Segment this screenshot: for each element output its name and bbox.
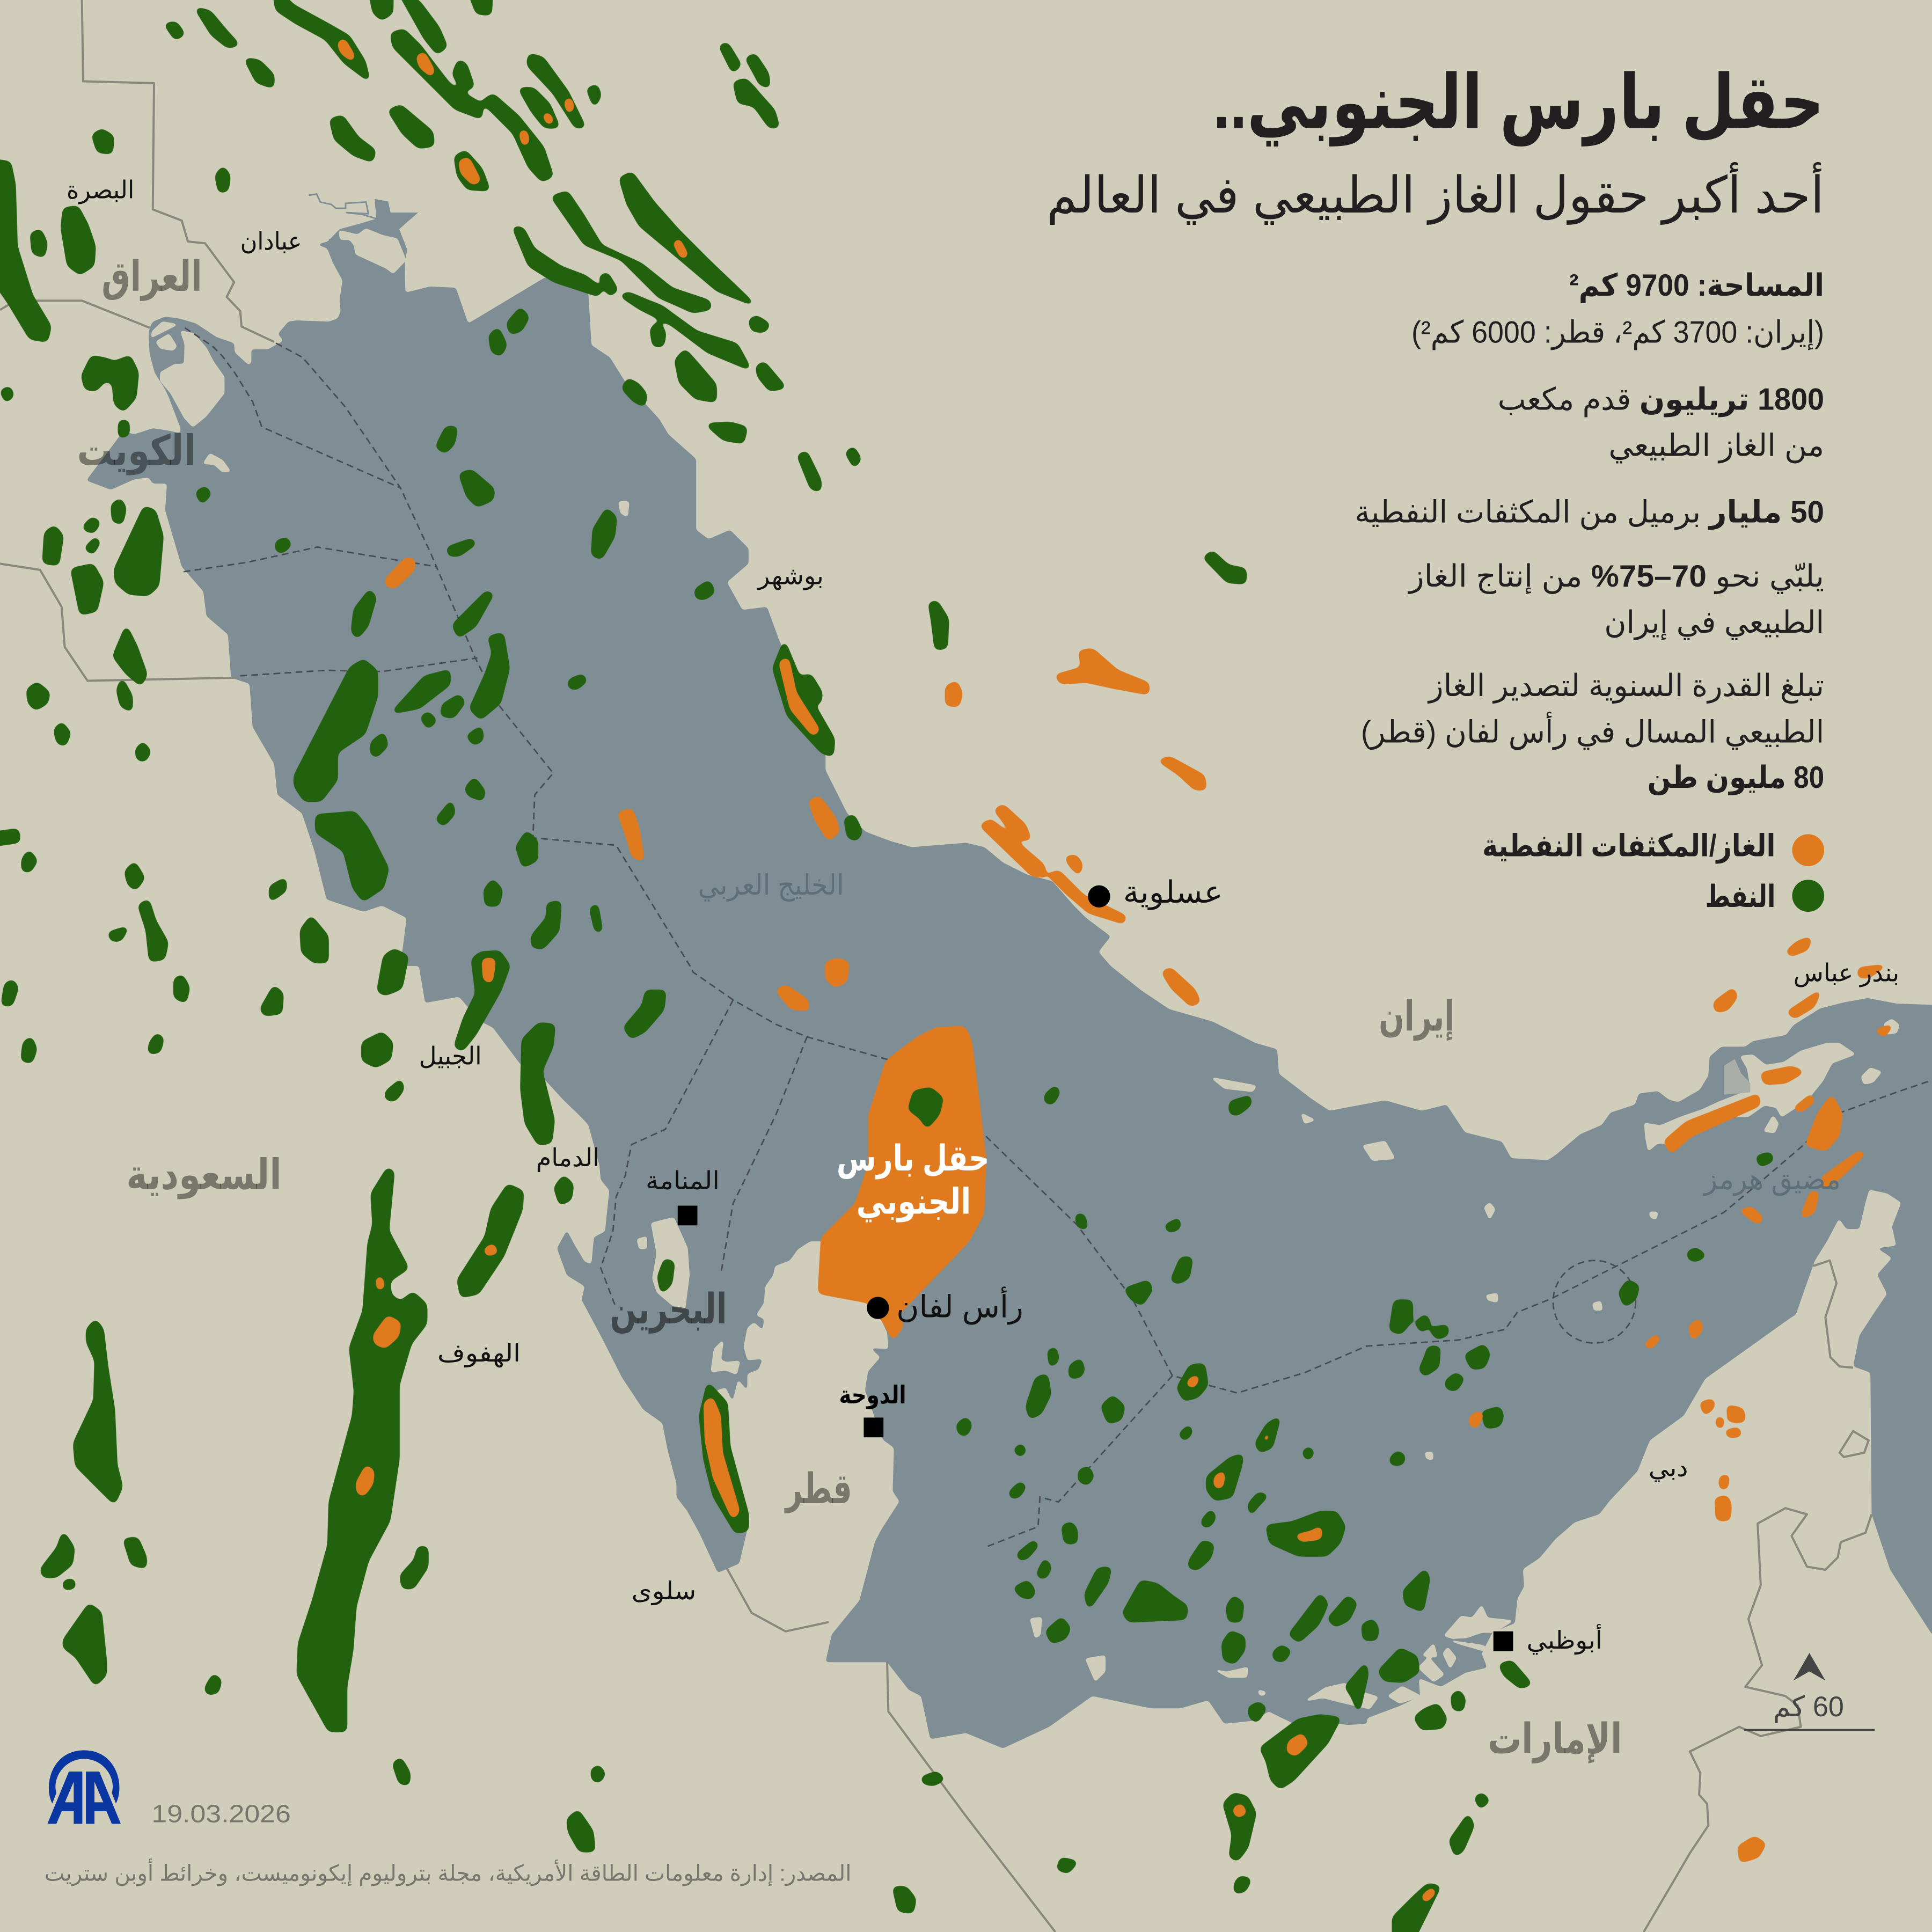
islands [151, 229, 1899, 1708]
country label: Iraq: العراق [101, 253, 202, 301]
country label: Qatar: قطر [784, 1465, 852, 1513]
city label: Ras Laffan: رأس لفان [896, 1286, 1023, 1324]
legend swatch: oil [1792, 880, 1824, 912]
city label: Abadan: عبادان [240, 227, 302, 255]
city label: Salwa: سلوى [632, 1577, 696, 1606]
fact: gas reserves line 1: 1800 تريليون قدم مكعب [1498, 382, 1824, 417]
city label: Bandar Abbas: بندر عباس [1794, 959, 1899, 987]
country label: UAE: الإمارات [1488, 1715, 1622, 1764]
icon: AA logo [47, 1750, 121, 1824]
gas fields near Asaluyeh [982, 650, 1810, 955]
South Pars field label: الجنوبي [857, 1182, 971, 1223]
oil fields: central and southern Gulf, UAE [1011, 1087, 1772, 1932]
city label: Basra: البصرة [67, 176, 134, 205]
date: 19.03.2026 [151, 1800, 291, 1828]
facts text block [1355, 268, 1824, 795]
fact: Iran share line 2: الطبيعي في إيران [1604, 605, 1824, 641]
city label: Dubai: دبي [1649, 1454, 1688, 1483]
marker: Doha [863, 1417, 883, 1437]
city label: Manama: المنامة [646, 1167, 720, 1195]
subtitle: أحد أكبر حقول الغاز الطبيعي في العالم [1046, 162, 1824, 225]
South Pars field label: حقل بارس [837, 1139, 990, 1179]
legend swatch: gas [1792, 834, 1824, 866]
oil fields: north-west quadrant [0, 0, 947, 961]
city label: Hofuf: الهفوف [437, 1339, 521, 1368]
South Pars field label [837, 1139, 990, 1223]
Shatt al-Arab river [309, 194, 376, 219]
gas fields: north-west quadrant [339, 40, 961, 859]
oil field east of Bushehr [1205, 553, 1245, 582]
fact: gas reserves line 2: من الغاز الطبيعي [1608, 428, 1824, 463]
fact: condensates: 50 مليار برميل من المكثفات النفطية [1355, 495, 1824, 530]
city label: Jubail: الجبيل [419, 1042, 482, 1070]
Shatt al-Arab estuary [328, 199, 418, 271]
city label: Dammam: الدمام [536, 1144, 599, 1172]
legend label: oil: النفط [1706, 880, 1775, 914]
capital label: Doha: الدوحة [839, 1381, 906, 1409]
fields: south-east quadrant [1011, 966, 1891, 1932]
country label: Iran: إيران [1379, 993, 1454, 1042]
fact: LNG line 2: الطبيعي المسال في رأس لفان (قطر) [1361, 712, 1824, 750]
gas cores: Saudi Arabia, Qatar and Bahrain [357, 960, 848, 1517]
fact: LNG line 1: تبلغ القدرة السنوية لتصدير الغاز [1427, 669, 1824, 704]
scale bar: 60 كم [1773, 1691, 1844, 1723]
north arrow [1794, 1653, 1825, 1681]
fields: south-west quadrant [3, 950, 970, 1912]
legend [1482, 829, 1824, 914]
legend label: gas/condensates: الغاز/المكثفات النفطية [1482, 829, 1775, 864]
fact: area: المساحة: 9700 كم² [1569, 268, 1824, 303]
country label: Bahrain: البحرين [610, 1285, 727, 1334]
marker: Asaluyeh [1088, 885, 1110, 908]
sea label: Arabian Gulf: الخليج العربي [698, 869, 844, 902]
country label: Saudi Arabia: السعودية [126, 1151, 282, 1199]
fact: LNG line 3: 80 مليون طن [1648, 760, 1824, 795]
oil fields: Saudi Arabia, Qatar and Bahrain [3, 950, 970, 1912]
city label: Bushehr: بوشهر [757, 561, 824, 590]
marker: Abu Dhabi [1494, 1631, 1513, 1651]
city label: Abu Dhabi: أبوظبي [1527, 1624, 1602, 1655]
marker: Manama [678, 1206, 697, 1225]
country label: Kuwait: الكويت [77, 427, 196, 475]
sea area [86, 229, 1932, 1748]
marker: Ras Laffan [867, 1297, 889, 1319]
map labels [67, 176, 1899, 1764]
city label: Asaluyeh: عسلوية [1123, 875, 1223, 910]
fact: area split: (إيران: 3700 كم²، قطر: 6000 كم²) [1411, 315, 1824, 350]
South Pars gas field [819, 1028, 984, 1339]
sea label: Strait of Hormuz: مضيق هرمز [1702, 1164, 1841, 1196]
Qeshm mangrove patch [1724, 1059, 1750, 1095]
source: المصدر: إدارة معلومات الطاقة الأمريكية، مجلة بتروليوم إيكونوميست، وخرائط أوبن ستريت [45, 1858, 851, 1886]
maritime boundaries (dashed) [184, 328, 1932, 1546]
map: Persian Gulf and Strait of Hormuz [86, 194, 1932, 1748]
fields: north-east quadrant [982, 553, 1810, 955]
fact: Iran share line 1: يلبّي نحو 70–75% من إنتاج الغاز [1407, 559, 1824, 595]
gas fields: Strait of Hormuz, UAE and inner cores [1163, 966, 1891, 1901]
